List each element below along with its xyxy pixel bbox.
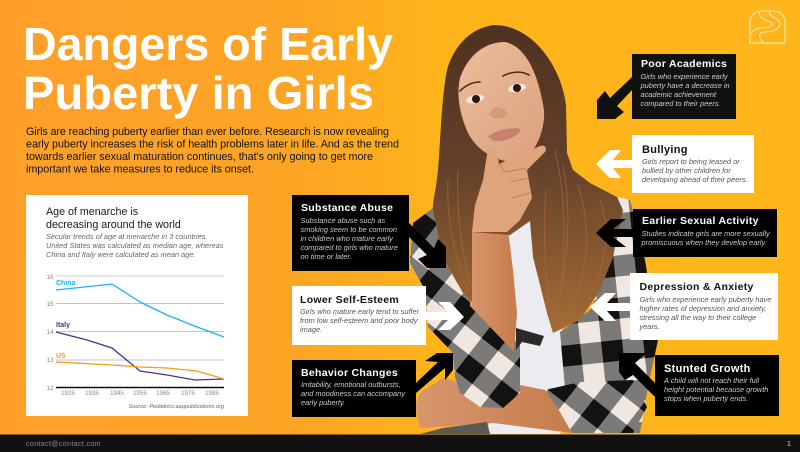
arrow: substance abuse xyxy=(409,223,446,268)
logo xyxy=(750,11,785,43)
panel: earlier sexual activity: Earlier Sexual Activity xyxy=(642,215,759,227)
panel: stunted growth: height potential because growth xyxy=(664,385,768,394)
panel: substance abuse: compared to girls who mature xyxy=(300,243,398,252)
panel: substance abuse: smoking seem to be common xyxy=(300,225,397,234)
panel: stunted growth: A child will not reach their full xyxy=(663,376,759,385)
x axis labels: 1955 xyxy=(133,390,147,397)
panel: behavior changes xyxy=(292,360,416,417)
panel: earlier sexual activity xyxy=(633,209,777,257)
panel: poor academics: puberty have a decrease in xyxy=(640,81,730,90)
y axis labels xyxy=(46,274,54,392)
y axis labels: 15 xyxy=(46,301,54,308)
arrow: lower self-esteem xyxy=(426,302,464,330)
chart panel xyxy=(26,195,248,416)
panel: depression and anxiety: Depression & Anxiety xyxy=(640,281,754,293)
x axis labels: 1935 xyxy=(85,390,99,397)
panel: behavior changes: Irritability, emotional outbursts, xyxy=(301,380,401,389)
x axis labels: 1965 xyxy=(156,390,170,397)
panel: depression and anxiety xyxy=(630,273,778,340)
panel: bullying: bullied by other children for xyxy=(642,166,731,175)
intro text: early puberty increases the risk of health problems later in life. And as the trend xyxy=(26,138,399,150)
intro text: important we take measures to reduce its onset. xyxy=(26,164,254,176)
series labels: China xyxy=(56,280,76,287)
panel: lower self-esteem: Girls who mature early tend to suffer xyxy=(300,307,420,316)
x axis labels: 1945 xyxy=(110,390,124,397)
panel: depression and anxiety: Girls who experience early puberty have xyxy=(640,295,771,304)
y axis labels: 14 xyxy=(46,329,54,336)
shirt left shoulder and sleeve xyxy=(410,208,520,408)
arrow: bullying xyxy=(596,150,632,178)
panel: bullying: developing ahead of their peers. xyxy=(642,175,748,184)
x axis labels xyxy=(61,390,219,397)
chart subtitle: United States was calculated as median age, whereas xyxy=(46,241,224,250)
panel: stunted growth: stops when puberty ends. xyxy=(664,394,748,403)
panel: poor academics: academic achievement xyxy=(640,90,717,99)
arrow: poor academics xyxy=(597,77,632,119)
panel: substance abuse: on time or later. xyxy=(300,252,352,261)
footer: 1 xyxy=(787,441,791,448)
panel: substance abuse: Substance Abuse xyxy=(301,202,393,214)
panel: poor academics xyxy=(632,54,736,119)
grid xyxy=(56,276,224,388)
intro text xyxy=(26,126,399,176)
panel: depression and anxiety: years. xyxy=(638,322,660,331)
panel: depression and anxiety: higher rates of depression and anxiety, xyxy=(640,304,766,313)
chart title xyxy=(46,206,181,231)
panel: poor academics: compared to their peers. xyxy=(640,99,721,108)
x axis labels: 1975 xyxy=(181,390,195,397)
title: Dangers of Early xyxy=(23,18,393,70)
panel: behavior changes: Behavior Changes xyxy=(301,367,398,379)
title xyxy=(23,18,393,119)
panel: substance abuse xyxy=(292,195,409,271)
series labels: US xyxy=(56,353,66,360)
source: Source: Pediatrics.aappublications.org xyxy=(129,404,225,410)
y axis labels: 12 xyxy=(46,385,54,392)
y axis labels: 16 xyxy=(46,274,54,281)
nose xyxy=(489,107,507,119)
panel: lower self-esteem xyxy=(292,286,426,345)
white top xyxy=(485,218,575,434)
hair strands xyxy=(448,150,606,330)
arrow: stunted growth xyxy=(619,353,655,397)
panel: behavior changes: early puberty. xyxy=(301,398,345,407)
right cuff xyxy=(545,380,647,433)
x axis labels: 1985 xyxy=(205,390,219,397)
footer xyxy=(0,434,800,452)
chart title: Age of menarche is xyxy=(46,206,138,218)
panel: earlier sexual activity: Studies indicate girls are more sexually xyxy=(642,229,771,238)
hair xyxy=(433,25,623,333)
panel: bullying xyxy=(632,135,754,193)
panel: depression and anxiety: stressing all the way to their college xyxy=(640,313,756,322)
panel: earlier sexual activity: promiscuous when they develop early. xyxy=(640,238,767,247)
series labels: Italy xyxy=(56,322,70,329)
panel: behavior changes: and moodiness can accompany xyxy=(301,389,406,398)
title: Puberty in Girls xyxy=(23,67,374,119)
chart title: decreasing around the world xyxy=(46,219,181,231)
arrow: depression and anxiety xyxy=(590,293,630,321)
line: China xyxy=(56,284,224,337)
panel: poor academics: Poor Academics xyxy=(641,58,727,70)
eyes xyxy=(465,82,527,105)
photo: girl xyxy=(410,25,658,434)
shirt right panel xyxy=(547,197,658,433)
brows xyxy=(460,72,529,91)
chart subtitle xyxy=(46,232,224,259)
chart subtitle: Secular trends of age at menarche in 3 countries. xyxy=(46,232,207,241)
y axis labels: 13 xyxy=(46,357,54,364)
footer: contact@contact.com xyxy=(26,439,101,448)
series labels xyxy=(56,280,76,360)
x axis labels: 1925 xyxy=(61,390,75,397)
line: US xyxy=(56,362,224,379)
panel: bullying: Girls report to being teased or xyxy=(642,157,740,166)
lower left shirt xyxy=(420,422,490,434)
intro text: towards earlier sexual maturation continues, that's only going to get more xyxy=(26,151,373,163)
intro text: Girls are reaching puberty earlier than ever before. Research is now revealing xyxy=(26,126,389,138)
rolled cuff knot xyxy=(516,328,544,350)
panel: lower self-esteem: image. xyxy=(300,325,322,334)
panel: bullying: Bullying xyxy=(642,144,688,156)
upper arm xyxy=(470,220,517,352)
panel: lower self-esteem: from low self-esteem and poor body xyxy=(300,316,419,325)
face xyxy=(458,42,544,161)
panel: stunted growth xyxy=(655,355,779,416)
panel: poor academics: Girls who experience early xyxy=(640,72,729,81)
hand xyxy=(472,146,546,232)
panel: lower self-esteem: Lower Self-Esteem xyxy=(300,294,399,306)
chart subtitle: China and Italy were calculated as mean age. xyxy=(46,250,196,259)
arrow: earlier sexual activity xyxy=(596,219,633,247)
panel: substance abuse: Substance abuse such as xyxy=(300,216,385,225)
lips xyxy=(488,128,521,141)
panel: substance abuse: in children who mature early xyxy=(300,234,394,243)
arrow: behavior changes xyxy=(416,353,453,393)
forearm and hand xyxy=(415,378,572,433)
line: Italy xyxy=(56,332,224,380)
panel: stunted growth: Stunted Growth xyxy=(664,363,751,375)
